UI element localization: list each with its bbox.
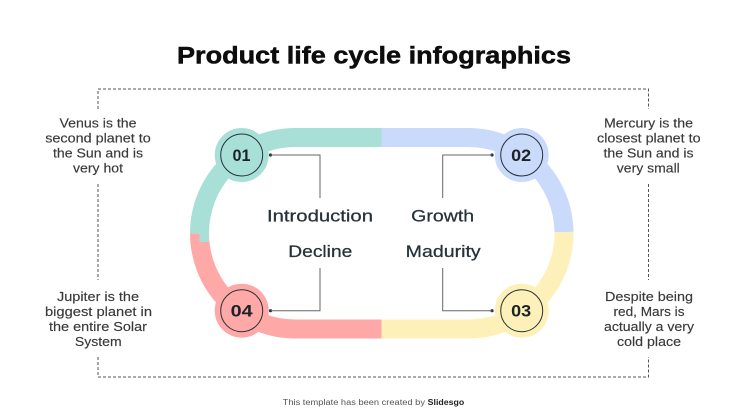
connector 02 bbox=[443, 153, 494, 198]
text block: Venus bbox=[45, 116, 151, 176]
footer credit bbox=[283, 398, 464, 407]
text block: Venus: Venus is the bbox=[60, 116, 137, 130]
text block: Jupiter: the entire Solar bbox=[49, 320, 147, 334]
label: Growth: Growth bbox=[411, 208, 474, 226]
step 01 badge bbox=[215, 128, 269, 182]
step 03 badge: 03 bbox=[511, 302, 531, 321]
text block: Jupiter bbox=[45, 290, 152, 349]
track segment: growth bbox=[382, 138, 564, 232]
step 04 badge: 04 bbox=[231, 302, 253, 321]
text block: Mars bbox=[604, 290, 695, 349]
text block: Mars: cold place bbox=[617, 335, 681, 349]
label: Decline: Decline bbox=[288, 243, 352, 261]
text block: Venus: second planet to bbox=[45, 132, 151, 146]
connector 04 bbox=[269, 268, 320, 312]
footer credit: Slidesgo bbox=[428, 398, 464, 407]
text block: Mercury: Mercury is the bbox=[604, 116, 693, 130]
track segment: maturity bbox=[382, 232, 564, 329]
text block: Mercury: closest planet to bbox=[597, 132, 701, 146]
step 02 badge: 02 bbox=[511, 146, 531, 165]
step 02 badge bbox=[495, 128, 549, 182]
cycle track bbox=[200, 138, 564, 329]
text block: Jupiter: biggest planet in bbox=[45, 305, 152, 319]
text block: Jupiter: System bbox=[75, 335, 122, 349]
connector 03 bbox=[443, 268, 494, 312]
text block: Mars: Despite being bbox=[605, 290, 693, 304]
track segment: introduction bbox=[200, 138, 382, 242]
dashed frame bbox=[98, 89, 648, 377]
text block: Mercury: very small bbox=[617, 162, 680, 176]
connector 01 bbox=[269, 153, 320, 198]
text block: Jupiter: Jupiter is the bbox=[57, 290, 139, 304]
text block: Venus: the Sun and is bbox=[53, 146, 143, 160]
step 04 badge bbox=[215, 284, 269, 338]
text block: Venus: very hot bbox=[73, 162, 124, 176]
title: Product life cycle infographics bbox=[177, 42, 571, 70]
text block: Mars: red, Mars is bbox=[614, 305, 684, 319]
step 01 badge: 01 bbox=[232, 146, 250, 165]
text block: Mercury: the Sun and is bbox=[604, 146, 694, 160]
track segment: decline bbox=[200, 233, 382, 329]
label: Madurity: Madurity bbox=[406, 243, 482, 261]
footer credit: This template has been created by bbox=[283, 398, 425, 407]
step 03 badge bbox=[495, 284, 549, 338]
label: Introduction: Introduction bbox=[267, 208, 373, 226]
text block: Mercury bbox=[597, 116, 701, 176]
text block: Mars: actually a very bbox=[604, 320, 695, 334]
